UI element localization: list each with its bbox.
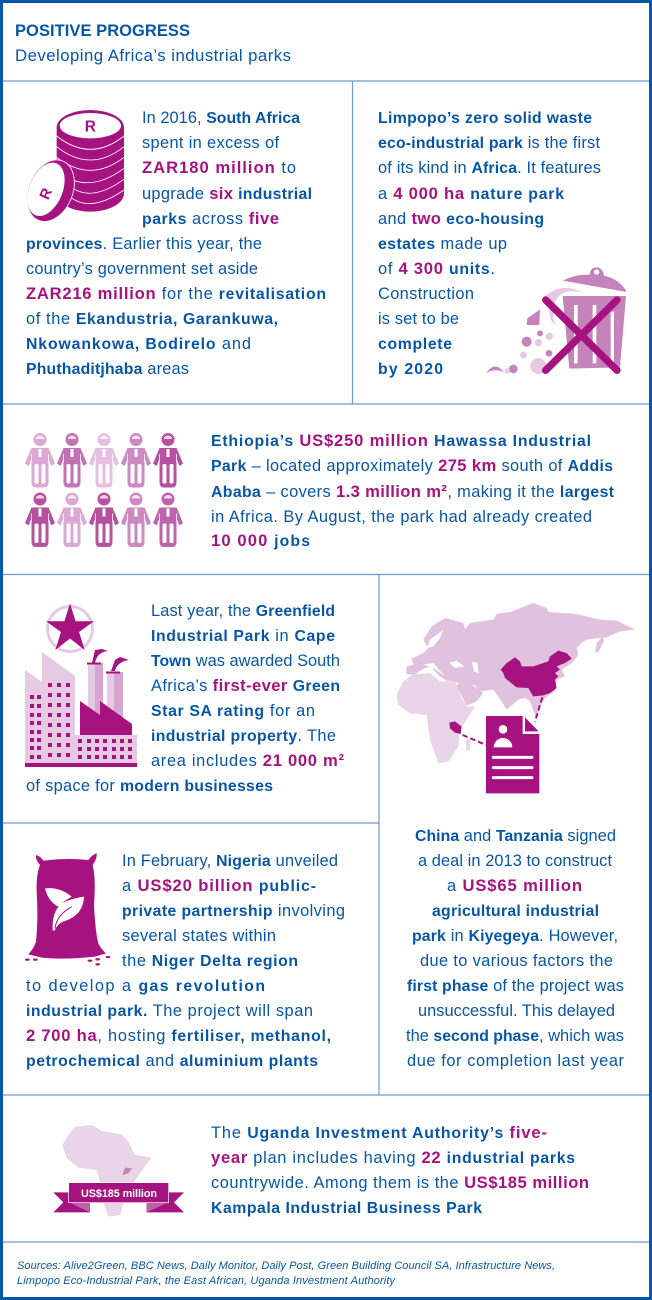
panel: Uganda [53,1123,589,1217]
text: Nigeria: to develop a gas revolution [26,977,265,995]
text: Limpopo: Construction [378,285,474,303]
text: China and Tanzania: a US$65 million [447,876,582,895]
text: Limpopo [378,110,601,378]
text: Nigeria: private partnership involving [122,902,345,920]
text: South Africa: ZAR180 million to [142,158,296,177]
sources [17,1260,555,1287]
panel: Greenfield [25,602,344,795]
text: Greenfield: Last year, the Greenfield [151,602,335,620]
text: South Africa [26,109,326,378]
icon: green star factory [25,604,137,767]
text: Uganda: The Uganda Investment Authority’s five- [211,1123,547,1142]
icon: Africa map with ribbon: US$185 million [81,1188,157,1200]
text: Greenfield: industrial property. The [151,727,336,745]
text: South Africa: country’s government set aside [26,260,258,278]
text: China and Tanzania: unsuccessful. This delayed [418,1002,615,1020]
text: Limpopo: of its kind in Africa. It features [378,159,601,177]
text: China and Tanzania: a deal in 2013 to construct [418,852,612,870]
icon: crossed-out bin [486,267,627,374]
icon: sack with leaf [25,853,110,965]
text: South Africa: provinces. Earlier this year, the [26,235,262,253]
sources: Sources: Alive2Green, BBC News, Daily Monitor, Daily Post, Green Building Council SA, Infrastructure News, [17,1260,555,1272]
text: China and Tanzania: park in Kiyegeya. However, [412,927,618,945]
text: Nigeria: industrial park. The project will span [26,1002,313,1020]
text: Limpopo: estates made up [378,235,507,253]
text: Greenfield: of space for modern businesses [26,777,273,795]
text: Ethiopia: Ababa – covers 1.3 million m², making it the largest [211,482,615,501]
text: Limpopo: eco-industrial park is the first [378,134,600,152]
text: South Africa: ZAR216 million for the revitalisation [26,284,326,303]
text: Limpopo: of 4 300 units. [378,259,495,278]
text: Nigeria: In February, Nigeria unveiled [122,852,338,870]
text: Ethiopia: Ethiopia’s US$250 million Hawassa Industrial [211,431,591,450]
text: Limpopo: a 4 000 ha nature park [378,184,564,203]
text: Greenfield: area includes 21 000 m² [151,751,344,770]
panel: Limpopo [378,110,627,378]
text: China and Tanzania [406,827,625,1070]
panel: South Africa [18,109,326,378]
panel: Ethiopia [25,431,615,550]
text: Ethiopia: Park – located approximately 275 km south of Addis [211,456,613,475]
text: China and Tanzania: the second phase, which was [406,1027,624,1045]
text: Ethiopia [211,431,615,550]
panel: Nigeria [25,852,345,1070]
text: Greenfield: Africa’s first-ever Green [151,676,340,695]
text: Ethiopia: in Africa. By August, the park had already created [211,508,592,526]
text: Uganda: countrywide. Among them is the US$185 million [211,1173,589,1192]
text: Nigeria: the Niger Delta region [122,952,298,970]
text: South Africa: Phuthaditjhaba areas [26,360,189,378]
text: South Africa: parks across five [142,209,279,228]
icon: coin stack: R [85,118,96,135]
text: Uganda [211,1123,589,1217]
text: China and Tanzania: first phase of the project was [407,977,624,995]
windows [30,683,132,759]
panel: China and Tanzania [397,603,635,1070]
icon: coin stack: R [37,186,56,202]
icon: Africa map with ribbon [53,1125,184,1217]
heading: POSITIVE PROGRESS [15,22,190,40]
text: Nigeria: petrochemical and aluminium plants [26,1052,318,1070]
text: Nigeria: several states within [122,927,276,945]
text: China and Tanzania: China and Tanzania signed [415,827,616,845]
title block [15,22,291,65]
text: Nigeria: 2 700 ha, hosting fertiliser, methanol, [26,1026,331,1045]
text: South Africa: spent in excess of [142,134,279,152]
sources: Limpopo Eco-Industrial Park, the East African, Uganda Investment Authority [17,1275,396,1287]
text: Uganda: year plan includes having 22 industrial parks [211,1148,575,1167]
icon: map with contract [397,603,635,793]
text: Greenfield: Town was awarded South [151,652,340,670]
icon: workers [25,433,183,547]
text: Uganda: Kampala Industrial Business Park [211,1200,482,1217]
text: Limpopo: Limpopo’s zero solid waste [378,110,592,127]
text: Ethiopia: 10 000 jobs [211,531,310,550]
text: South Africa: Nkowankowa, Bodirelo and [26,335,251,353]
text: Limpopo: and two eco-housing [378,209,544,228]
text: China and Tanzania: agricultural industrial [432,903,599,920]
text: Nigeria [26,852,345,1070]
text: Greenfield: Star SA rating for an [151,702,315,720]
text: Limpopo: by 2020 [378,361,443,378]
text: Greenfield: Industrial Park in Cape [151,627,335,645]
text: South Africa: of the Ekandustria, Garankuwa, [26,310,278,328]
subtitle: Developing Africa’s industrial parks [15,46,291,65]
text: China and Tanzania: due for completion last year [407,1052,625,1070]
text: Greenfield [26,602,344,795]
text: Limpopo: complete [378,336,452,353]
text: Nigeria: a US$20 billion public- [122,876,316,895]
icon: coin stack [18,110,124,229]
text: Limpopo: is set to be [378,310,459,328]
text: China and Tanzania: due to various factors the [420,952,613,970]
text: South Africa: In 2016, South Africa [142,109,300,127]
text: South Africa: upgrade six industrial [142,184,312,203]
